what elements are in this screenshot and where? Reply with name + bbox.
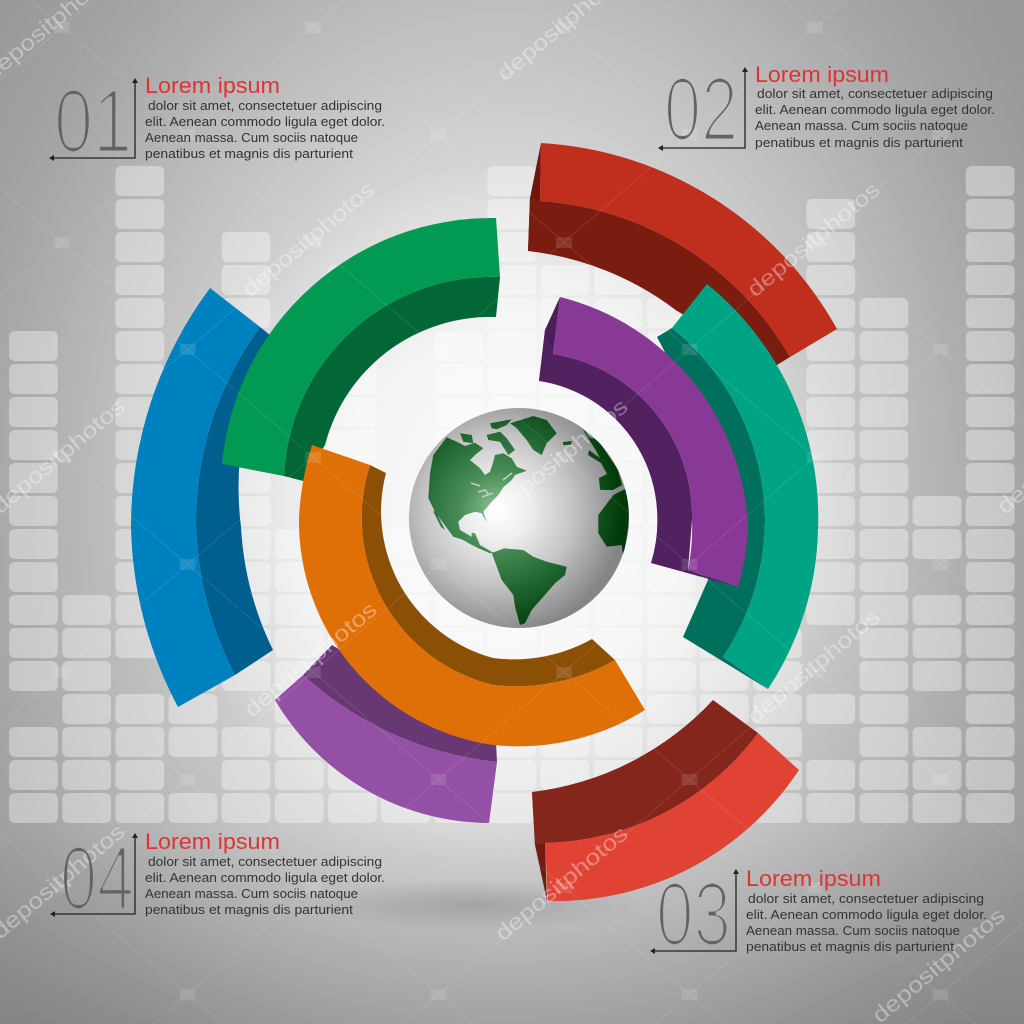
callout 01: 01 — [54, 72, 132, 172]
great lakes — [471, 473, 512, 497]
callout 03: Lorem ipsum — [746, 866, 881, 891]
watermark text: depositphotos — [490, 394, 633, 519]
callout 01: dolor sit amet, consectetuer adipiscing — [148, 98, 382, 113]
segment: blue — [131, 288, 275, 707]
callout 04 — [50, 829, 385, 929]
callout 02: penatibus et magnis dis parturient — [755, 135, 963, 150]
segment: purple bottom — [275, 645, 497, 823]
callout 02 — [658, 60, 995, 160]
callout 03: Aenean massa. Cum sociis natoque — [746, 923, 960, 938]
callout 04: Lorem ipsum — [145, 829, 280, 854]
callout 02: dolor sit amet, consectetuer adipiscing — [757, 86, 993, 101]
watermark text: depositphotos — [742, 604, 885, 729]
callout 04: elit. Aenean commodo ligula eget dolor. — [145, 870, 385, 885]
callout 02: elit. Aenean commodo ligula eget dolor. — [755, 102, 995, 117]
background equalizer grid — [9, 166, 1015, 823]
segment: green — [222, 218, 500, 481]
watermark text: depositphotos — [742, 177, 885, 302]
segment: teal — [657, 284, 818, 689]
callout 02: Lorem ipsum — [755, 62, 889, 87]
segment: purple top — [539, 297, 748, 587]
callout 03 — [650, 865, 987, 965]
callout 02: Aenean massa. Cum sociis natoque — [755, 118, 968, 133]
callout 01 — [49, 72, 385, 172]
callout 04: Aenean massa. Cum sociis natoque — [145, 886, 358, 901]
globe — [409, 408, 629, 628]
watermark text: depositphotos — [237, 177, 380, 302]
callout 01: penatibus et magnis dis parturient — [145, 146, 353, 161]
callout 03: dolor sit amet, consectetuer adipiscing — [748, 891, 984, 906]
callout 04: 04 — [60, 829, 134, 929]
callout 04: penatibus et magnis dis parturient — [145, 902, 353, 917]
floor shadow — [305, 879, 645, 931]
callout 03: penatibus et magnis dis parturient — [746, 939, 954, 954]
callout 03: 03 — [656, 865, 731, 965]
callout 04: dolor sit amet, consectetuer adipiscing — [148, 854, 382, 869]
callout 01: elit. Aenean commodo ligula eget dolor. — [145, 114, 385, 129]
callout 01: Aenean massa. Cum sociis natoque — [145, 130, 358, 145]
callout 03: elit. Aenean commodo ligula eget dolor. — [746, 907, 987, 922]
segment: red top — [528, 143, 837, 365]
segment: orange — [299, 445, 645, 746]
central glow — [160, 165, 850, 855]
watermark text: depositphotos — [239, 597, 382, 722]
continents — [428, 416, 629, 625]
callout 01: Lorem ipsum — [145, 73, 280, 98]
callout 02: 02 — [664, 60, 738, 160]
watermark text: depositphotos — [490, 821, 633, 946]
segment: red bottom — [532, 700, 799, 901]
lower floor shading — [0, 830, 1024, 1024]
